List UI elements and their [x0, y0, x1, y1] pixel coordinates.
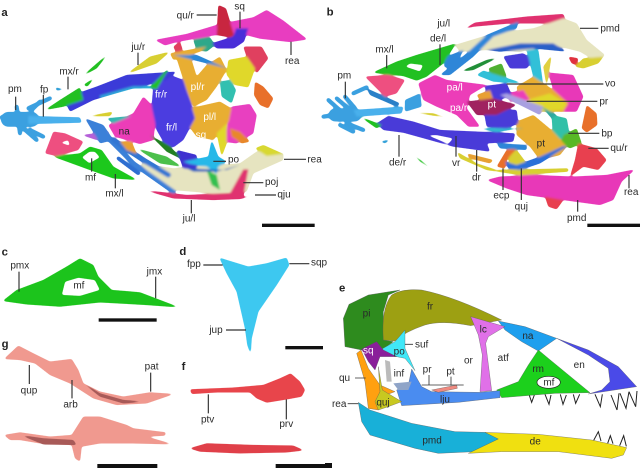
label pm: pm — [8, 84, 22, 95]
label rea, right: rea — [307, 155, 322, 166]
label vo: vo — [605, 79, 616, 90]
label pmd, top — [580, 24, 620, 35]
label dr: dr — [472, 173, 482, 184]
label fp — [40, 85, 49, 117]
panels c, d, f and g: isolated bones — [2, 246, 329, 468]
panel g: quadrate views: arb — [63, 400, 78, 411]
label po: po — [228, 155, 240, 166]
diagram labels: po — [394, 346, 405, 357]
diagram labels: lc — [480, 325, 487, 336]
panel c: maxilla: c — [2, 247, 8, 259]
panel letter a: a — [1, 7, 8, 19]
label qju — [255, 190, 291, 201]
label fr/r: fr/r — [155, 89, 168, 100]
panel g: quadrate views — [2, 339, 174, 468]
label mf: mf — [85, 173, 96, 184]
label bp — [568, 129, 613, 140]
diagram labels: pt — [446, 366, 455, 377]
diagram labels — [332, 302, 585, 447]
label fr/l: fr/l — [166, 123, 177, 134]
panel g: quadrate views: qup — [21, 385, 38, 396]
label poj: poj — [265, 177, 278, 188]
skull diagram bones — [343, 290, 637, 458]
label pa/r: pa/r — [450, 103, 468, 114]
label mx/l — [375, 45, 394, 68]
label dr — [472, 150, 482, 184]
label pr: pr — [599, 96, 609, 107]
label sq: sq — [234, 1, 245, 12]
label po — [213, 155, 240, 166]
label sq, lower: sq — [196, 130, 206, 141]
panel d: postorbital — [179, 246, 328, 354]
diagram labels: lju — [440, 394, 450, 405]
diagram labels: or — [464, 356, 474, 367]
label qju: qju — [277, 190, 291, 201]
scale bar b — [587, 224, 640, 227]
panel d: postorbital: fpp — [187, 259, 201, 270]
panel a: skull bones, dorsal view — [1, 1, 322, 227]
label qu/r — [177, 10, 217, 21]
label na: na — [119, 126, 130, 137]
label mx/l — [105, 174, 124, 200]
diagram labels: en — [574, 360, 585, 371]
label pmd, top: pmd — [600, 24, 620, 35]
panel f: pterygoid views: prv — [279, 419, 293, 430]
label mx/l: mx/l — [105, 189, 124, 200]
panel d: postorbital: sqp — [311, 258, 328, 269]
diagram labels: pmd — [422, 435, 442, 446]
panel c: maxilla: jmx — [146, 266, 162, 277]
label quj: quj — [515, 201, 528, 212]
label rea: rea — [624, 187, 639, 198]
panel c: maxilla: mf — [73, 280, 85, 291]
panel f: pterygoid views — [182, 361, 329, 468]
label pa/l: pa/l — [447, 83, 463, 94]
diagram labels: na — [522, 331, 534, 342]
diagram labels: quj — [376, 398, 390, 409]
label de/r: de/r — [389, 158, 407, 169]
label ju/l: ju/l — [182, 214, 195, 225]
label poj — [243, 177, 278, 188]
label ju/l — [182, 200, 195, 225]
label pt: pt — [488, 100, 496, 111]
panel d: postorbital: jup — [208, 325, 223, 336]
label de/r — [389, 135, 407, 169]
label rea, right — [284, 155, 322, 166]
scale bar e — [325, 463, 332, 468]
diagram labels: qu — [339, 373, 350, 384]
diagram labels: rm — [532, 364, 544, 375]
panel c: maxilla: pmx — [10, 261, 29, 272]
label mx/r — [59, 66, 79, 89]
label qu/r — [588, 143, 628, 154]
panel letter b: b — [327, 6, 334, 18]
label pm: pm — [337, 70, 351, 81]
label qu/r: qu/r — [177, 10, 195, 21]
diagram labels: fr — [427, 302, 434, 313]
diagram labels: pi — [363, 309, 370, 320]
label pm — [8, 84, 22, 110]
label mx/l: mx/l — [375, 45, 394, 56]
label ju/r: ju/r — [130, 42, 146, 53]
label pl/r: pl/r — [191, 82, 205, 93]
diagram labels: pr — [423, 365, 432, 376]
diagram labels: rea — [332, 399, 347, 410]
label ecp — [493, 168, 510, 201]
label rea: rea — [285, 56, 300, 67]
label qu/r: qu/r — [610, 143, 628, 154]
panel d: postorbital: d — [179, 246, 186, 258]
panel c: maxilla — [2, 247, 179, 322]
label ecp: ecp — [493, 190, 510, 201]
panel g: quadrate views: pat — [145, 361, 159, 372]
upper teeth — [529, 391, 637, 410]
label vo — [507, 79, 616, 90]
label ju/r — [130, 42, 146, 65]
label quj — [515, 168, 528, 212]
label sq — [234, 1, 245, 28]
scale bar a — [262, 224, 315, 227]
label mf — [85, 158, 96, 184]
label ju/l: ju/l — [436, 19, 450, 30]
diagram labels: suf — [415, 340, 429, 351]
label rea — [624, 175, 639, 198]
panel b: skull bones, ventral view — [323, 6, 640, 227]
panel letter e: e — [339, 283, 345, 295]
diagram labels: mf — [543, 378, 555, 389]
label pl/l: pl/l — [203, 112, 216, 123]
label pm — [337, 70, 351, 98]
segmented bones of panel b — [323, 14, 635, 209]
panel f: pterygoid views: ptv — [201, 414, 214, 425]
diagram labels: de — [530, 436, 541, 447]
label pmd, bottom — [567, 200, 586, 224]
label de/l: de/l — [430, 33, 446, 44]
label vr: vr — [452, 158, 461, 169]
label mx/r: mx/r — [59, 66, 79, 77]
segmented bones of panel a — [2, 5, 307, 200]
label fp: fp — [40, 85, 49, 96]
diagram labels: atf — [498, 353, 509, 364]
label rea — [285, 42, 300, 67]
label pr — [527, 96, 609, 107]
diagram labels: inf — [394, 368, 404, 379]
label vr — [452, 136, 461, 169]
diagram labels: sq — [363, 346, 374, 357]
label pt, lower: pt — [537, 139, 545, 150]
lower teeth — [594, 432, 626, 446]
label pmd, bottom: pmd — [567, 213, 586, 224]
panel e: skull reconstruction drawing — [332, 283, 637, 458]
label bp: bp — [601, 129, 613, 140]
panel f: pterygoid views: f — [182, 361, 186, 373]
panel g: quadrate views: g — [2, 339, 9, 351]
label de/l — [430, 33, 446, 65]
